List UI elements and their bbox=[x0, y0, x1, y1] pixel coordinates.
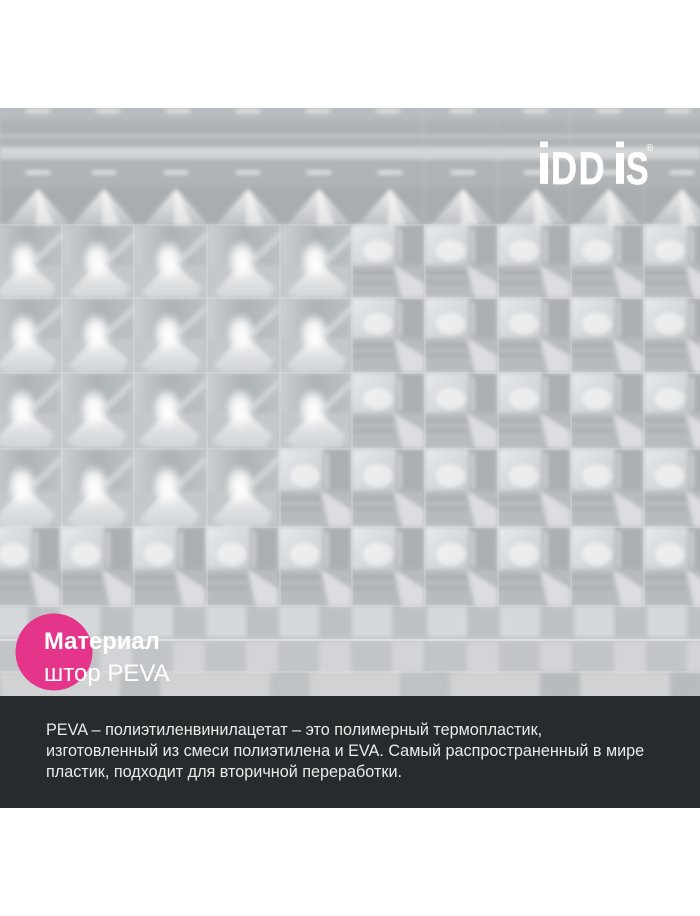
logo: IDDIS: i bbox=[612, 132, 628, 197]
text block: PEVA description: пластик, подходит для вторичной переработки. bbox=[46, 763, 402, 781]
panel: dark description band bbox=[0, 696, 700, 808]
text block: PEVA description: PEVA – полиэтиленвинилацетат – это полимерный термопластик, bbox=[46, 721, 542, 739]
heading: material title: штор PEVA bbox=[44, 660, 170, 687]
heading: material title: Материал bbox=[44, 628, 160, 655]
logo: IDDIS: ® bbox=[646, 143, 654, 154]
logo: IDDIS bbox=[536, 132, 654, 197]
logo: IDDIS: S bbox=[626, 144, 649, 194]
text block: PEVA description: изготовленный из смеси полиэтилена и EVA. Самый распространенный в мире bbox=[46, 742, 644, 760]
infographic canvas bbox=[0, 108, 700, 808]
photo: PEVA curtain material texture bbox=[0, 108, 700, 698]
logo: IDDIS: DD bbox=[551, 143, 606, 194]
badge: pink circle bbox=[16, 614, 92, 690]
logo: IDDIS: i bbox=[536, 132, 552, 197]
